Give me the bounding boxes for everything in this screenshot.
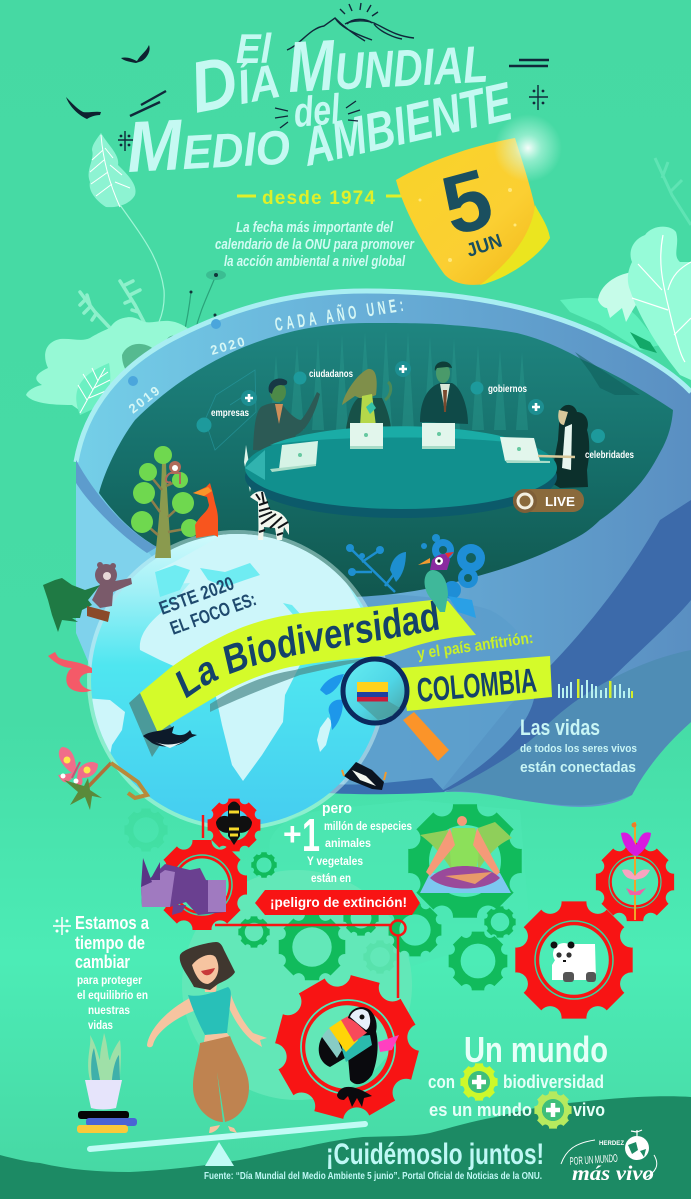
title [125, 18, 519, 188]
icon: double strokes right [509, 60, 549, 66]
seesaw [90, 1124, 365, 1149]
laptop [422, 423, 455, 449]
text: estamos a tiempo de cambiar: tiempo de [75, 933, 145, 953]
year: 2019: 2019 [126, 382, 164, 416]
text: desde 1974: desde 1974 [262, 188, 375, 209]
icon: leaf by the rim [76, 363, 110, 415]
text: con biodiversidad: biodiversidad [503, 1072, 604, 1092]
text: description: La fecha más importante del [236, 219, 394, 236]
heading: este 2020 el foco es [157, 573, 259, 640]
text: es un mundo vivo: es un mundo [429, 1100, 532, 1120]
gears: green [124, 808, 516, 990]
plant: left sprigs [80, 205, 164, 328]
plant: left bush [26, 317, 195, 415]
gear: panda [515, 901, 633, 1019]
icon: woodpecker [418, 552, 454, 612]
title: DÍA [184, 33, 285, 129]
text: estamos a tiempo de cambiar: el equilibrio en [77, 988, 148, 1002]
continents [85, 525, 390, 781]
icon: red fox [48, 652, 92, 692]
text: con biodiversidad: con [428, 1072, 455, 1092]
title: del [292, 85, 343, 136]
globe [85, 525, 390, 830]
icon: plus gobiernos [528, 399, 544, 415]
banner: peligro de extinción [255, 890, 420, 915]
laptop [500, 437, 575, 463]
text: description: la acción ambiental a nivel global [224, 253, 406, 270]
text: estamos a tiempo de cambiar: cambiar [75, 952, 130, 972]
icon: bird [66, 97, 101, 119]
text: estamos a tiempo de cambiar: para proteger [77, 973, 142, 987]
title: El [236, 25, 272, 72]
blue plant by magnifier [320, 674, 344, 730]
curtain [270, 330, 528, 430]
label: gobiernos: gobiernos [488, 383, 527, 395]
heading: este 2020 el foco es: ESTE 2020 [157, 573, 237, 620]
label: celebridades: celebridades [585, 449, 634, 461]
illustration: woman balancing [147, 942, 267, 1133]
chart: equalizer bars [558, 679, 633, 698]
light circle behind woman [182, 870, 412, 1100]
heading: cada año une: CADA AÑO UNE: [273, 293, 409, 336]
label: empresas: empresas [211, 407, 249, 419]
icon: sparkle left [118, 131, 133, 151]
icon: yellow gear plus [460, 1063, 498, 1101]
icon: leaf at title [89, 133, 136, 207]
ribbon: la biodiversidad [129, 600, 476, 757]
heading: este 2020 el foco es: EL FOCO ES: [168, 589, 259, 640]
person: man speaking [244, 378, 320, 492]
calendar: 5 jun [396, 114, 562, 285]
icon: tree with monkey [131, 446, 199, 558]
text: con biodiversidad [428, 1063, 604, 1101]
toucan [319, 1007, 399, 1107]
panel: blue bowl [76, 291, 691, 807]
icon: magnifier with colombian flag [343, 659, 449, 761]
icon: bird [121, 45, 150, 63]
ribbon: colombia [401, 656, 552, 711]
live badge: LIVE [545, 494, 575, 509]
icon: bear with fir tree [43, 562, 132, 632]
text: es un mundo vivo [429, 1091, 605, 1129]
icon: green gear plus [534, 1091, 572, 1129]
icon: orca [143, 726, 197, 748]
icon: plus empresas [241, 390, 257, 406]
text: las vidas [520, 715, 637, 776]
laptop [270, 441, 318, 472]
blue plant [346, 534, 485, 618]
gear: flower [596, 822, 674, 921]
year: 2020: 2020 [209, 333, 248, 358]
icon: mountain with sun [287, 3, 414, 50]
icon: plus ciudadanos [395, 361, 411, 377]
text: +1 millón de especies: pero [322, 800, 352, 817]
illustration: potted plant on books [77, 1033, 137, 1133]
gear: rhino [141, 840, 247, 930]
icon: giraffe [193, 483, 218, 538]
icon: zebra [250, 491, 289, 540]
icon: penguin [342, 762, 386, 790]
gear: toucan [261, 961, 433, 1133]
text: las vidas: de todos los seres vivos [520, 743, 637, 755]
label circles [196, 372, 605, 443]
text: +1 millón de especies: animales [325, 838, 371, 850]
panel: dark conference scene [99, 323, 673, 597]
seesaw pivot [205, 1142, 234, 1166]
text: es un mundo vivo: vivo [573, 1100, 605, 1120]
text: +1 millón de especies: + [283, 816, 302, 852]
text: +1 millón de especies [283, 800, 412, 885]
title: AMBIENTE [296, 71, 519, 178]
logo: por un mundo más vivo: HERDEZ [599, 1141, 624, 1147]
gear: bee [203, 799, 260, 851]
gear: meditation [408, 804, 522, 918]
icon: butterfly and branch [58, 747, 147, 810]
timeline dots [128, 319, 221, 386]
icon: double strokes left [130, 91, 166, 116]
banner: peligro de extinción: ¡peligro de extinción! [270, 894, 407, 910]
person: woman typing [550, 405, 589, 488]
text: +1 millón de especies: Y vegetales [307, 856, 363, 868]
light bubble behind text [265, 800, 530, 1000]
text: estamos a tiempo de cambiar: Estamos a [75, 913, 150, 933]
ribbon: la biodiversidad: La Biodiversidad [176, 600, 439, 698]
text: estamos a tiempo de cambiar: vidas [88, 1018, 113, 1032]
title: MUNDIAL [286, 18, 490, 108]
laptop [350, 423, 383, 449]
screen outline [205, 370, 256, 450]
label: ciudadanos: ciudadanos [309, 368, 353, 380]
person: man in suit [420, 362, 468, 424]
text: description [215, 219, 415, 270]
connector lines [215, 920, 406, 998]
text: estamos a tiempo de cambiar [53, 913, 150, 1032]
bottom dark wave [0, 1096, 691, 1199]
logo: por un mundo más vivo: más vivo [572, 1161, 654, 1185]
text: y el país anfitrión: y el país anfitrión: [416, 630, 534, 663]
conference table [245, 426, 557, 518]
text: +1 millón de especies: están en [311, 873, 351, 885]
heading: cuidémoslo juntos: ¡Cuidémoslo juntos! [326, 1138, 544, 1171]
calendar: 5 jun: JUN [464, 231, 505, 262]
source: Fuente: “Día Mundial del Medio Ambiente 5 junio”. Portal Oficial de Noticias de la ONU. [204, 1171, 542, 1182]
calendar: 5 jun: 5 [432, 150, 502, 253]
text: description: calendario de la ONU para promover [215, 236, 415, 253]
title: MEDIO [125, 100, 292, 188]
plant: flower stems [183, 270, 226, 338]
text: +1 millón de especies: 1 [302, 809, 320, 861]
text: las vidas: Las vidas [520, 715, 600, 740]
plant: right big leaves [560, 158, 691, 380]
heading: un mundo: Un mundo [464, 1029, 608, 1070]
ribbon: colombia: COLOMBIA [415, 662, 538, 710]
text: estamos a tiempo de cambiar: nuestras [88, 1003, 130, 1017]
live badge [513, 489, 584, 513]
logo: por un mundo más vivo [561, 1130, 657, 1185]
text: las vidas: están conectadas [520, 759, 636, 776]
person: woman with blonde hair [342, 369, 391, 445]
icon: sparkle cross [53, 917, 71, 935]
icon: sparkle right [529, 85, 548, 110]
logo: por un mundo más vivo: POR UN MUNDO [569, 1153, 618, 1168]
text: +1 millón de especies: millón de especies [324, 821, 412, 833]
